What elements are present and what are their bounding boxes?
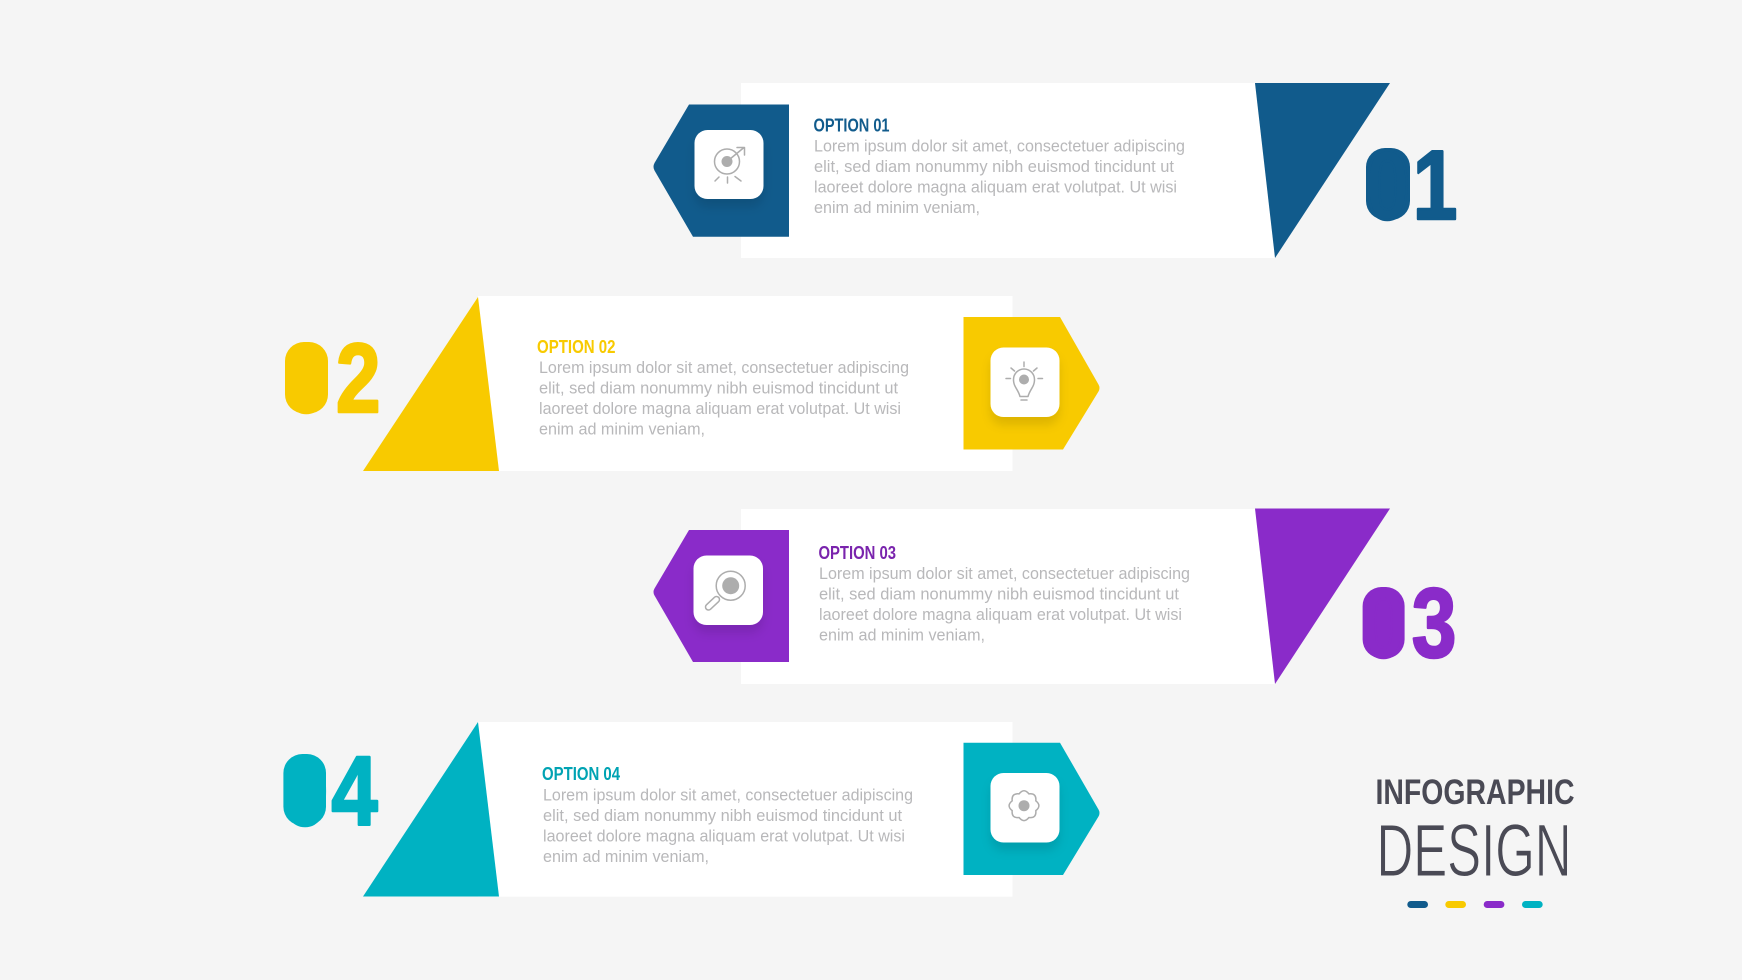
option 01 white card (741, 83, 1275, 258)
panel: option 02 (284, 296, 1100, 471)
option 04 body text: Lorem ipsum dolor sit amet, consectetuer adipiscing (543, 786, 913, 804)
icon: gear badge (1009, 791, 1039, 821)
option 02 hexagon tab (964, 317, 1100, 450)
legend colour dashes (1407, 901, 1543, 908)
option 02 body text: enim ad minim veniam, (539, 420, 705, 438)
panel: option 01 (654, 83, 1457, 258)
option 01 heading: OPTION 01 (814, 116, 890, 136)
number 03: 03 (1361, 568, 1456, 678)
option 03 icon tile (694, 556, 763, 625)
option 02 body text: laoreet dolore magna aliquam erat volutpat. Ut wisi (539, 399, 901, 418)
title: infographic: INFOGRAPHIC (1376, 773, 1574, 812)
panel: option 04 (282, 722, 1100, 897)
option 02 heading: OPTION 02 (537, 337, 616, 357)
number 04: 04 (282, 738, 378, 847)
icon: magnifying glass (708, 571, 745, 607)
option 03 body text: elit, sed diam nonummy nibh euismod tincidunt ut (819, 584, 1179, 604)
option 02 body text: Lorem ipsum dolor sit amet, consectetuer adipiscing (539, 358, 909, 377)
option 02 triangle (363, 297, 499, 471)
option 03 body text: enim ad minim veniam, (819, 626, 985, 644)
option 03 triangle (1255, 508, 1390, 684)
icon: light bulb (1006, 362, 1042, 400)
number 01: 01 (1365, 130, 1457, 240)
option 04 body text: enim ad minim veniam, (543, 847, 709, 866)
option 04 hexagon tab (964, 743, 1100, 875)
title: design: DESIGN (1376, 809, 1572, 892)
option 04 triangle (363, 722, 499, 896)
option 01 body text: Lorem ipsum dolor sit amet, consectetuer adipiscing (814, 136, 1185, 156)
option 01 body text: enim ad minim veniam, (814, 198, 980, 217)
option 04 icon tile (990, 773, 1060, 842)
option 04 white card (478, 722, 1012, 897)
title block (1376, 773, 1574, 908)
option 04 body text: elit, sed diam nonummy nibh euismod tincidunt ut (543, 806, 902, 825)
option 03 heading: OPTION 03 (818, 543, 896, 563)
option 03 hexagon tab (654, 530, 789, 662)
option 01 triangle (1255, 83, 1390, 258)
option 04 body text (543, 786, 913, 866)
option 02 body text: elit, sed diam nonummy nibh euismod tincidunt ut (539, 378, 898, 398)
option 02 icon tile (990, 348, 1060, 417)
option 02 body text (539, 358, 909, 438)
option 04 body text: laoreet dolore magna aliquam erat volutpat. Ut wisi (543, 826, 905, 846)
option 01 hexagon tab (654, 104, 789, 237)
option 01 body text: elit, sed diam nonummy nibh euismod tincidunt ut (814, 157, 1174, 176)
option 03 body text (819, 564, 1190, 644)
option 03 white card (741, 509, 1275, 684)
number 02: 02 (284, 323, 381, 433)
panel: option 03 (654, 508, 1456, 684)
option 03 body text: laoreet dolore magna aliquam erat volutpat. Ut wisi (819, 605, 1182, 624)
option 01 icon tile (694, 130, 764, 199)
option 04 heading: OPTION 04 (542, 764, 620, 784)
option 01 body text (814, 136, 1185, 217)
option 03 body text: Lorem ipsum dolor sit amet, consectetuer adipiscing (819, 564, 1190, 583)
icon: target with arrow (714, 148, 744, 183)
option 02 white card (478, 296, 1012, 471)
option 01 body text: laoreet dolore magna aliquam erat volutpat. Ut wisi (814, 178, 1177, 196)
